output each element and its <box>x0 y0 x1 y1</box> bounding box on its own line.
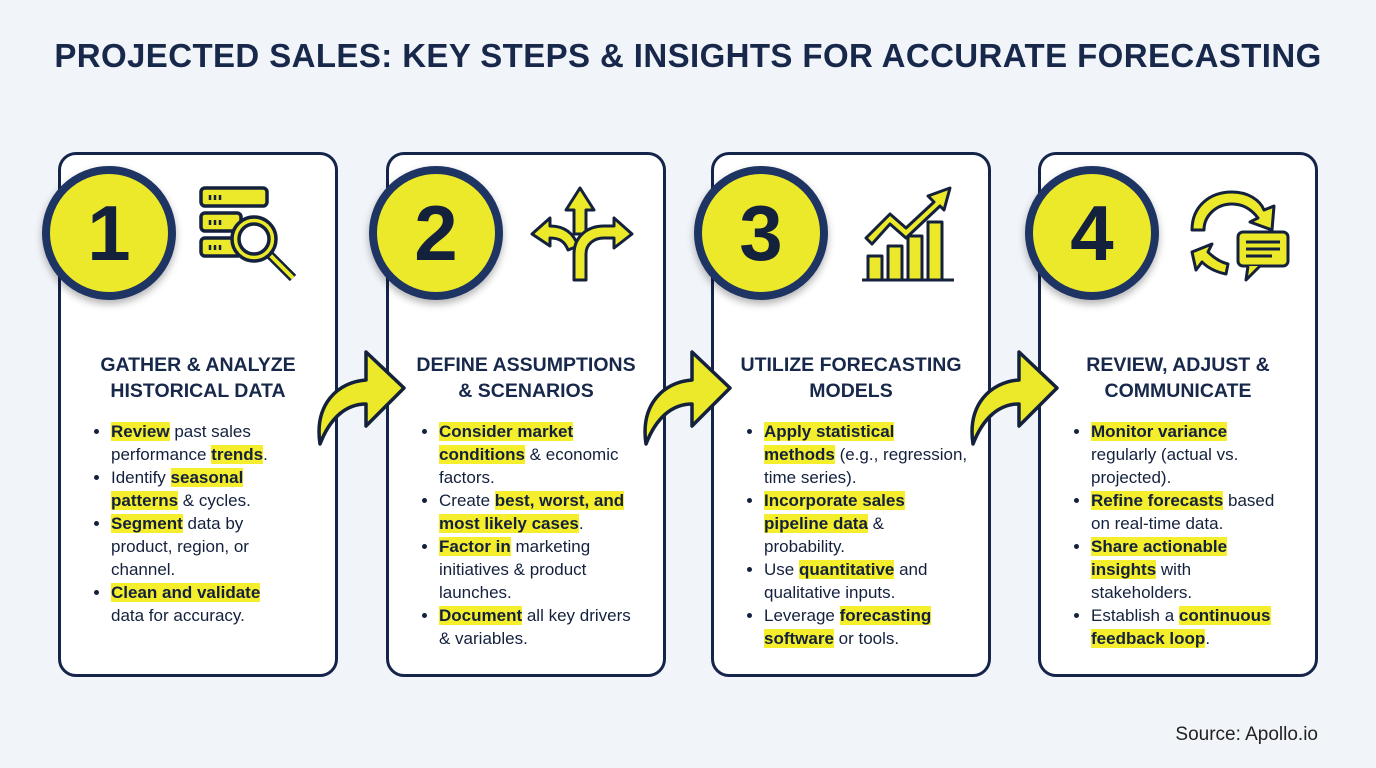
bullets: step 4: Monitor variance regularly (actual vs. projected). <box>1091 422 1238 487</box>
bullets: step 1: Identify seasonal patterns & cycles. <box>111 468 251 510</box>
bullets: step 1 <box>94 422 268 625</box>
number circle 2 <box>369 166 503 300</box>
arrow 3 <box>970 350 1059 446</box>
heading: step 2 <box>416 354 636 402</box>
source note: Source: Apollo.io <box>1175 724 1318 745</box>
arrow 1 <box>317 350 406 446</box>
heading: step 4 <box>1086 354 1270 402</box>
number circle 4: 4 <box>1070 189 1114 277</box>
icon: database search <box>199 186 296 282</box>
bullets: step 3: Leverage forecasting software or tools. <box>764 606 931 648</box>
bullets: step 2: Document all key drivers & variables. <box>439 606 631 648</box>
bullets: step 2: Factor in marketing initiatives & product launches. <box>439 537 590 602</box>
panel: step 1 <box>58 152 338 677</box>
icon: feedback cycle <box>1190 190 1290 282</box>
heading: step 2: DEFINE ASSUMPTIONS <box>416 354 636 376</box>
icon: growth chart <box>862 186 954 282</box>
heading: step 1: HISTORICAL DATA <box>110 380 286 402</box>
heading: step 2: & SCENARIOS <box>458 380 594 402</box>
heading: step 3 <box>740 354 962 402</box>
heading: step 1: GATHER & ANALYZE <box>100 354 296 376</box>
bullets: step 4: Establish a continuous feedback loop. <box>1091 606 1270 648</box>
bullets: step 3: Apply statistical methods (e.g., regression, time series). <box>764 422 967 487</box>
number circle 1 <box>42 166 176 300</box>
icon: split arrows <box>530 186 634 282</box>
number circle 2: 2 <box>414 189 458 277</box>
heading: step 3: MODELS <box>809 380 893 402</box>
title: PROJECTED SALES: KEY STEPS & INSIGHTS FOR ACCURATE FORECASTING <box>54 37 1322 74</box>
bullets: step 4: Refine forecasts based on real-time data. <box>1091 491 1274 533</box>
heading: step 1 <box>100 354 296 402</box>
number circle 1: 1 <box>87 189 131 277</box>
bullets: step 1: Review past sales performance trends. <box>111 422 268 464</box>
heading: step 4: COMMUNICATE <box>1105 380 1251 402</box>
heading: step 4: REVIEW, ADJUST & <box>1086 354 1270 376</box>
bullets: step 3 <box>747 422 967 648</box>
arrow 2 <box>643 350 732 446</box>
bullets: step 1: Segment data by product, region, or channel. <box>111 514 249 579</box>
bullets: step 4 <box>1074 422 1274 648</box>
number circle 4 <box>1025 166 1159 300</box>
bullets: step 1: Clean and validate data for accuracy. <box>111 583 260 625</box>
bullets: step 2 <box>422 422 631 648</box>
panel: step 4 <box>1038 152 1318 677</box>
bullets: step 2: Create best, worst, and most likely cases. <box>439 491 624 533</box>
number circle 3 <box>694 166 828 300</box>
bullets: step 2: Consider market conditions & economic factors. <box>439 422 618 487</box>
bullets: step 4: Share actionable insights with stakeholders. <box>1091 537 1227 602</box>
bullets: step 3: Incorporate sales pipeline data & probability. <box>764 491 905 556</box>
number circle 3: 3 <box>739 189 783 277</box>
heading: step 3: UTILIZE FORECASTING <box>740 354 962 376</box>
panel: step 3 <box>711 152 991 677</box>
panel: step 2 <box>386 152 666 677</box>
bullets: step 3: Use quantitative and qualitative inputs. <box>764 560 927 602</box>
